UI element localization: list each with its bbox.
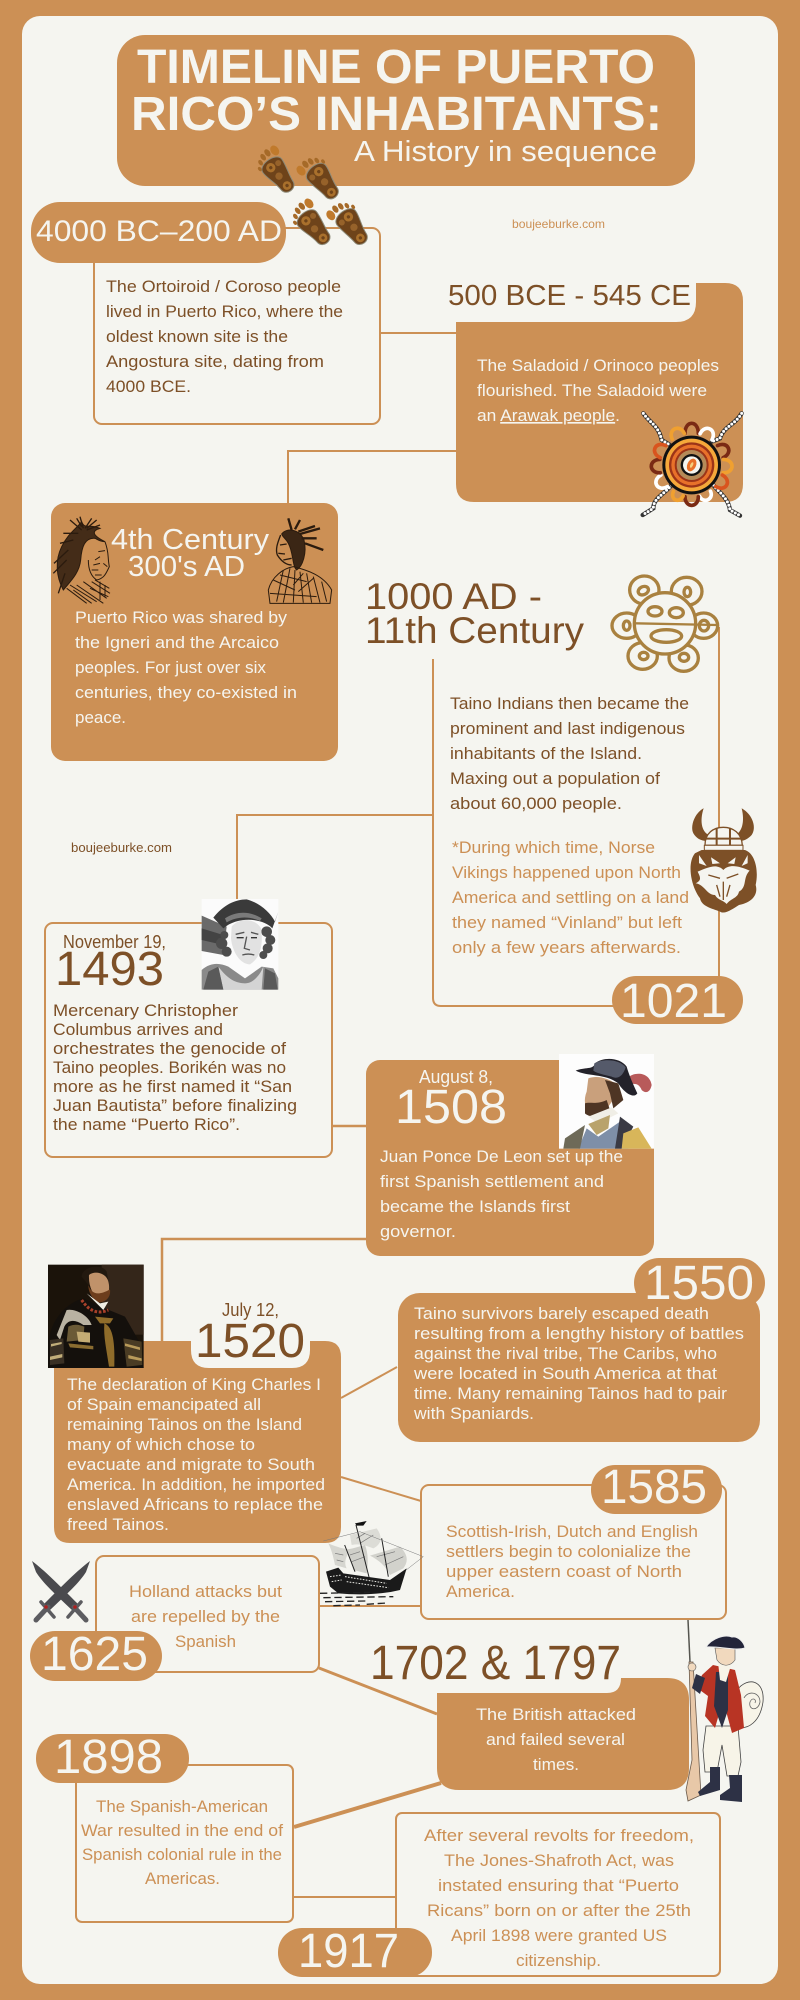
panel: 1917: After several revolts for freedom, (424, 1827, 694, 1845)
panel: 4th Century: peace. (75, 709, 126, 727)
panel: 1898: Americas. (145, 1870, 220, 1888)
connector: card 9 to card 10 (319, 1605, 421, 1607)
panel: 1898 (36, 1731, 293, 1922)
panel: 1898: War resulted in the end of (81, 1822, 283, 1840)
panel: 4000 BC-200 AD: oldest known site is the (106, 328, 288, 346)
panel: 1917: 1917 (298, 1925, 399, 1978)
panel: August 8, 1508: became the Islands first (380, 1198, 570, 1216)
panel: 1585 (421, 1461, 726, 1619)
panel: July 12, 1520 (54, 1300, 341, 1543)
panel: Taino era card: Maxing out a population of (450, 770, 660, 788)
panel: August 8, 1508 (366, 1060, 654, 1256)
panel: July 12, 1520: The declaration of King Charles I (67, 1376, 321, 1394)
connector: card 7 to card 8 (341, 1367, 397, 1398)
panel: 1625: Holland attacks but (129, 1583, 282, 1601)
icon: King Charles portrait (48, 1265, 144, 1368)
panel: Taino era card: inhabitants of the Island. (450, 745, 642, 763)
panel: July 12, 1520: 1520 (195, 1315, 305, 1368)
heading: 1000 AD - 11th Century (365, 576, 585, 651)
panel: 4th Century: 300's AD (128, 551, 245, 583)
icon: British soldier (686, 1620, 763, 1802)
panel: August 8, 1508: first Spanish settlement and (380, 1173, 604, 1191)
panel: 1585: settlers begin to colonialize the (446, 1543, 691, 1561)
panel: 4000 BC-200 AD: Angostura site, dating from (106, 353, 324, 371)
connector: card 1 to card 2 (380, 332, 456, 334)
panel: 1550: against the rival tribe, The Caribs, who (414, 1345, 717, 1363)
icon: Viking head (691, 808, 757, 913)
panel: Taino era card: they named “Vinland” but left (452, 914, 682, 932)
connector: card 2 to card 3 (288, 451, 456, 503)
panel: 1585: America. (446, 1583, 515, 1601)
icon: Ponce de Leon portrait (559, 1054, 654, 1149)
connector: card 5 to card 6 (332, 1125, 366, 1127)
panel: July 12, 1520: evacuate and migrate to South (67, 1456, 315, 1474)
icon: indigenous sun (643, 413, 742, 516)
icon: Columbus portrait (202, 899, 278, 990)
panel: 1550: 1550 (644, 1257, 754, 1310)
connector: card 4 to card 5 (237, 815, 433, 923)
heading: 1000 AD - 11th Century: 1000 AD - (365, 576, 542, 617)
panel: 1917: April 1898 were granted US (451, 1927, 667, 1945)
panel: July 12, 1520: freed Tainos. (67, 1516, 169, 1534)
panel: July 12, 1520: many of which chose to (67, 1436, 255, 1454)
panel: November 19, 1493: orchestrates the genocide of (53, 1040, 286, 1058)
panel: Taino era card: about 60,000 people. (450, 795, 622, 813)
watermark: boujeeburke.com lower: boujeeburke.com (71, 841, 172, 855)
panel: 1702 & 1797 (370, 1637, 689, 1790)
panel: 1917: instated ensuring that “Puerto (438, 1877, 679, 1895)
panel: 1550: Taino survivors barely escaped death (414, 1305, 709, 1323)
icon: engraved portrait left (53, 517, 110, 603)
panel: 1625: Spanish (175, 1633, 236, 1651)
title block: RICO’S INHABITANTS: (131, 88, 662, 141)
panel: 500 BCE - 545 CE: 500 BCE - 545 CE (448, 280, 691, 312)
panel: Taino era card: prominent and last indigenous (450, 720, 685, 738)
panel: 1898: 1898 (54, 1731, 163, 1784)
panel: Taino era card: America and settling on a land (452, 889, 689, 907)
panel: 500 BCE - 545 CE: an Arawak people . (477, 407, 620, 425)
panel: 4000 BC-200 AD: 4000 BCE. (106, 378, 191, 396)
heading: 1000 AD - 11th Century: 11th Century (365, 610, 585, 651)
icon: Taino sun (612, 576, 718, 671)
panel: 1550: resulting from a lengthy history of battles (414, 1325, 744, 1343)
panel: 4th Century: peoples. For just over six (75, 659, 267, 677)
title block: A History in sequence (354, 136, 657, 168)
panel: Taino era card (433, 627, 719, 1006)
connector: card 7 to card 9 (341, 1477, 421, 1501)
panel: July 12, 1520: July 12, (222, 1300, 279, 1320)
panel: 500 BCE - 545 CE (448, 280, 743, 502)
connector: 1898 to 1917 (293, 1896, 396, 1898)
panel: July 12, 1520: enslaved Africans to replace the (67, 1496, 323, 1514)
panel: November 19, 1493: Taino peoples. Borikén was no (53, 1059, 286, 1077)
panel: 4th Century: the Igneri and the Arcaico (75, 634, 279, 652)
panel: November 19, 1493: Columbus arrives and (53, 1021, 223, 1039)
panel: 1550: with Spaniards. (413, 1405, 534, 1423)
panel: August 8, 1508: governor. (380, 1223, 456, 1241)
connector: card 6 to card 7 (162, 1239, 366, 1341)
panel: 4000 BC-200 AD (31, 202, 380, 424)
connector: 1702 to 1898 (294, 1783, 441, 1827)
icon: engraved portrait right (268, 518, 332, 603)
panel: 4th Century: 4th Century (111, 524, 270, 556)
panel: 1702 & 1797: 1702 & 1797 (370, 1637, 621, 1690)
panel: 1585: Scottish-Irish, Dutch and English (446, 1523, 698, 1541)
pill: 1021: 1021 (620, 975, 727, 1028)
panel: November 19, 1493: November 19, (63, 932, 166, 952)
panel: July 12, 1520: America. In addition, he imported (67, 1476, 325, 1494)
panel: 4th Century: centuries, they co-existed in (75, 684, 297, 702)
panel: July 12, 1520: of Spain emancipated all (67, 1396, 261, 1414)
panel: 500 BCE - 545 CE: The Saladoid / Orinoco peoples (477, 357, 719, 375)
panel: 1898: Spanish colonial rule in the (82, 1846, 282, 1864)
icon: footprints (251, 143, 375, 252)
panel: 1625: 1625 (41, 1628, 148, 1681)
panel: 1917: Ricans” born on or after the 25th (427, 1902, 691, 1920)
connector: 1625 to 1702 (319, 1668, 437, 1714)
title block: TIMELINE OF PUERTO (137, 41, 655, 94)
panel: 1585: 1585 (601, 1461, 707, 1514)
panel: Taino era card: Vikings happened upon North (452, 864, 681, 882)
panel: 1702 & 1797: and failed several (486, 1731, 625, 1749)
panel: 1585: upper eastern coast of North (446, 1563, 682, 1581)
panel: Taino era card: *During which time, Norse (452, 839, 655, 857)
panel: 1550 (398, 1257, 765, 1442)
panel: 1625 (30, 1556, 319, 1681)
panel: 1550: were located in South America at that (413, 1365, 717, 1383)
panel: 4000 BC-200 AD: The Ortoiroid / Coroso people (106, 278, 341, 296)
watermark: boujeeburke.com: boujeeburke.com (512, 217, 605, 231)
panel: July 12, 1520: remaining Tainos on the Island (67, 1416, 302, 1434)
panel: Taino era card: only a few years afterwards. (452, 939, 681, 957)
panel: August 8, 1508: 1508 (395, 1081, 507, 1134)
panel: 1625: are repelled by the (131, 1608, 280, 1626)
panel: August 8, 1508: Juan Ponce De Leon set up the (380, 1148, 623, 1166)
panel: November 19, 1493 (45, 923, 332, 1157)
panel: 1898: The Spanish-American (96, 1798, 268, 1816)
panel: November 19, 1493: more as he first named it “San (53, 1078, 292, 1096)
title block (117, 35, 695, 186)
panel: 1917: The Jones-Shafroth Act, was (444, 1852, 674, 1870)
panel: Taino era card: Taino Indians then became the (450, 695, 689, 713)
panel: 4000 BC-200 AD: lived in Puerto Rico, where the (106, 303, 343, 321)
panel: 1550: time. Many remaining Tainos had to pair (414, 1385, 728, 1403)
panel: 4000 BC-200 AD: 4000 BC–200 AD (36, 215, 282, 248)
icon: crossed swords (32, 1561, 90, 1620)
panel: November 19, 1493: Mercenary Christopher (53, 1002, 239, 1020)
panel: August 8, 1508: August 8, (419, 1067, 493, 1087)
panel: 1917: citizenship. (516, 1952, 601, 1970)
panel: November 19, 1493: the name “Puerto Rico”. (53, 1116, 240, 1134)
panel: 1917 (278, 1813, 720, 1978)
panel: 500 BCE - 545 CE: flourished. The Saladoid were (477, 382, 707, 400)
icon: sailing ship (320, 1521, 423, 1606)
panel: 1702 & 1797: times. (533, 1756, 579, 1774)
panel: 4th Century: Puerto Rico was shared by (75, 609, 288, 627)
panel: November 19, 1493: Juan Bautista” before finalizing (53, 1097, 297, 1115)
panel: 4th Century (51, 503, 338, 761)
panel: November 19, 1493: 1493 (55, 943, 164, 996)
panel: 1702 & 1797: The British attacked (476, 1706, 636, 1724)
